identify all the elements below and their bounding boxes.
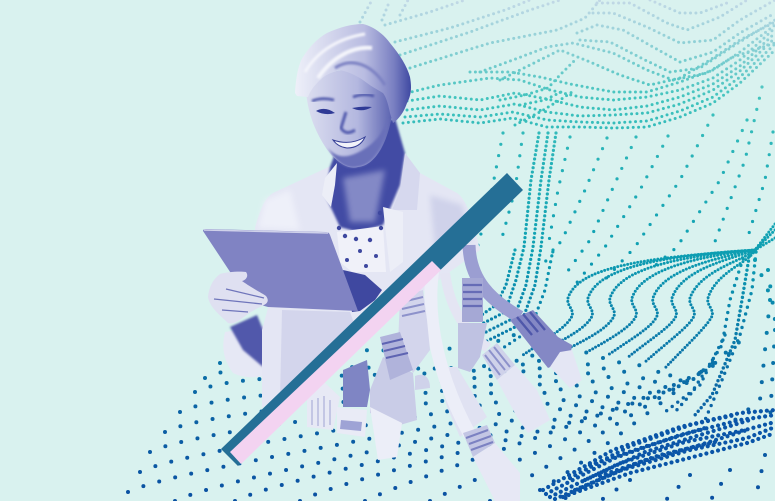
- dotted wave: top mesh: [360, 0, 775, 128]
- centre top connector: [398, 290, 430, 373]
- connector three boot: [482, 343, 515, 380]
- dark connector at left: [343, 360, 370, 407]
- shirt: [255, 152, 480, 408]
- dark connector head: [550, 350, 582, 388]
- hand: [208, 272, 268, 323]
- blouse and necklace: [337, 211, 386, 272]
- forearm shadow: [230, 315, 266, 367]
- white long cable: [431, 268, 470, 435]
- face: [306, 69, 392, 168]
- dark hand behind tablet: [343, 270, 382, 312]
- pale cable behind: [445, 273, 488, 348]
- dotted wave: dark blue band: [543, 410, 775, 499]
- connector three head: [497, 365, 550, 433]
- collar: [322, 163, 337, 207]
- cables and connectors: [307, 245, 582, 501]
- hair: [295, 24, 411, 123]
- long connector head: [473, 443, 520, 501]
- dotted wave: dense column: [478, 133, 556, 350]
- long connector boot: [463, 425, 495, 457]
- centre main head: [370, 407, 402, 460]
- clear connector left: [307, 380, 340, 430]
- connector two head: [458, 323, 487, 372]
- tablet: [203, 229, 358, 311]
- pale connector behind long cable: [437, 367, 487, 437]
- eyes and brows: [312, 95, 374, 101]
- dark cable: [469, 245, 520, 317]
- sleeve: [223, 325, 268, 377]
- diagonal pink bar: [230, 261, 441, 464]
- dark connector boot and body: [510, 310, 572, 368]
- dotted wave: wavy fan: [523, 224, 775, 368]
- diagonal teal bar: [221, 173, 523, 466]
- clear connector middle: [337, 407, 367, 437]
- neck: [325, 118, 405, 232]
- dotted wave: sparse lines below mesh: [470, 87, 773, 285]
- mouth: [333, 137, 365, 148]
- dotted wave: dense stem: [665, 252, 756, 420]
- connector two boot: [462, 278, 483, 322]
- centre main connector: [370, 357, 417, 425]
- woman: [203, 24, 480, 408]
- dotted wave: sparse fan to lower left: [128, 260, 775, 501]
- nose: [341, 112, 355, 133]
